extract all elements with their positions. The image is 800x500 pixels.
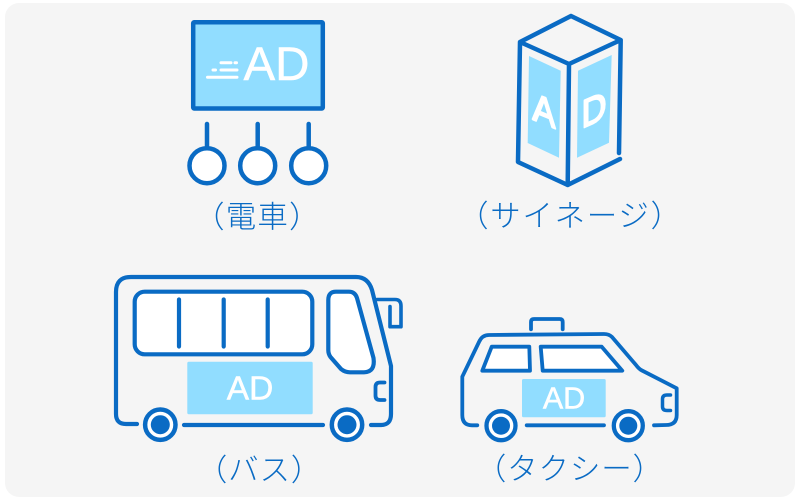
bus ad text: AD [227, 370, 273, 408]
taxi body [462, 334, 677, 425]
bus front window [328, 292, 374, 372]
ad text: AD [244, 38, 310, 91]
signage ad letters [533, 83, 606, 138]
bus side windows [135, 292, 312, 354]
signage ad letters: D [582, 83, 606, 138]
icon: train hanging ad [190, 22, 326, 183]
bus wheels [145, 410, 362, 440]
taxi ad panel [522, 379, 606, 417]
taxi ad text: AD [543, 382, 585, 416]
taxi headlight [662, 395, 670, 410]
label: train: （電車） [194, 200, 321, 234]
icon: taxi [462, 319, 677, 440]
speed lines [208, 63, 237, 77]
bus headlight [376, 382, 384, 400]
label: bus: （バス） [197, 454, 322, 488]
signage ad letters: A [533, 86, 556, 138]
signage side panels [528, 55, 612, 158]
straps and rings [190, 124, 326, 183]
taxi windows [482, 347, 530, 371]
signage outline [518, 16, 621, 185]
bus body [116, 277, 391, 425]
label: signage: （サイネージ） [458, 200, 683, 234]
bus ad panel [187, 362, 313, 414]
icon: digital signage [518, 16, 621, 185]
bus mirror [377, 300, 401, 327]
icon: bus [116, 277, 401, 440]
ad board [193, 22, 323, 108]
label: taxi: （タクシー） [476, 452, 664, 486]
taxi wheels [486, 411, 643, 440]
taxi roof sign [531, 319, 563, 329]
